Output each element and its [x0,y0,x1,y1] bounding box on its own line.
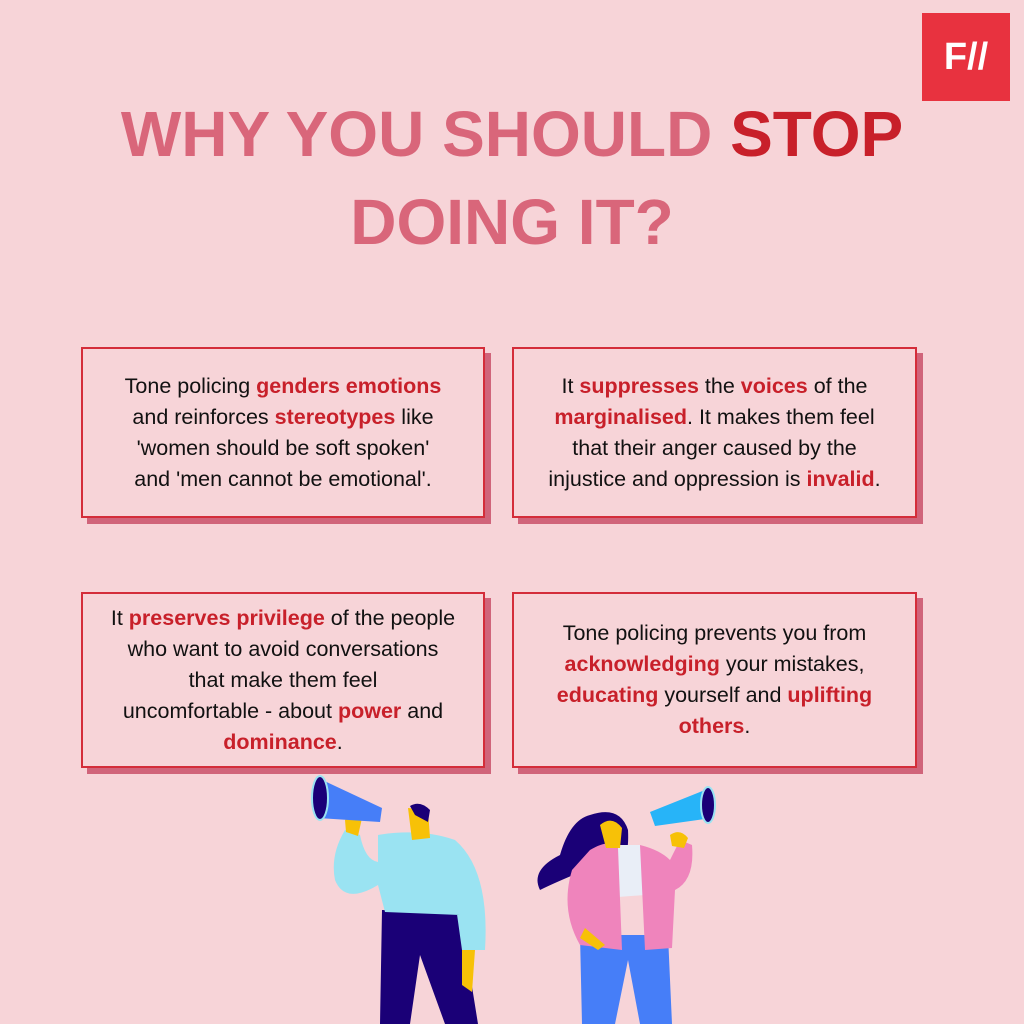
panel: genders emotions: and reinforces stereotypes like [132,404,434,428]
panel: preserves privilege: who want to avoid conversations [128,636,438,660]
figure: man [312,776,486,1024]
panel: suppresses voices: injustice and oppression is invalid. [548,466,881,490]
panel: genders emotions: and 'men cannot be emotional'. [134,466,432,490]
panel: preserves privilege: It preserves privilege of the people [111,606,455,630]
logo [922,13,1010,101]
panel: preserves privilege [81,592,485,768]
panel: prevents acknowledging [512,592,917,768]
logo: F// [944,36,988,78]
panel: genders emotions: 'women should be soft spoken' [137,436,429,460]
panel: prevents acknowledging: acknowledging your mistakes, [565,652,864,676]
panel: suppresses voices: that their anger caused by the [572,436,857,460]
panel: prevents acknowledging: Tone policing prevents you from [563,621,866,645]
panel: preserves privilege: dominance. [223,730,343,754]
title [121,98,903,258]
panel: genders emotions [81,347,485,518]
panel: preserves privilege: that make them feel [189,668,377,692]
title: WHY YOU SHOULD STOP [121,98,903,170]
panel: genders emotions: Tone policing genders emotions [125,374,441,398]
panel: prevents acknowledging: others. [679,714,750,738]
figure: woman [538,787,715,1024]
panel: suppresses voices: It suppresses the voices of the [562,374,867,398]
panel: prevents acknowledging: educating yourself and uplifting [557,683,872,707]
panel: suppresses voices [512,347,917,518]
panel: preserves privilege: uncomfortable - about power and [123,698,443,722]
panel: suppresses voices: marginalised. It makes them feel [554,404,875,428]
title: DOING IT? [350,186,674,258]
